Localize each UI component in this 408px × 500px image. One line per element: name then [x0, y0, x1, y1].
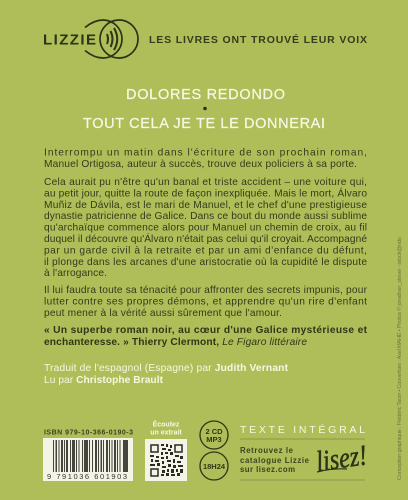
catalogue text: Retrouvez le — [240, 446, 294, 455]
synopsis intro paragraph — [44, 148, 367, 170]
synopsis main paragraph: Cela aurait pu n'être qu'un banal et triste accident – une voiture qui, — [44, 177, 367, 188]
vertical print credits: Conception graphique : Frédéric Tacer • Couverture : Axel MAHÉ • Photos © jonathan_stever - istock@ndo — [396, 237, 403, 480]
synopsis closing paragraph: lutter contre ses propres démons, et apprendre qu'un rire d'enfant — [44, 296, 367, 308]
synopsis main paragraph: à l'arrogance. — [44, 268, 107, 279]
title block: DOLORES REDONDO — [126, 87, 285, 103]
barcode: 9 791036 601903 — [47, 472, 127, 481]
badge: 2 CD MP3: MP3 — [206, 435, 222, 444]
ISBN label: ISBN 979-10-366-0190-3 — [44, 430, 133, 436]
barcode — [43, 438, 133, 481]
catalogue text: catalogue Lizzie — [240, 456, 310, 465]
synopsis main paragraph — [44, 177, 367, 279]
full text label: TEXTE INTÉGRAL — [240, 423, 365, 436]
badge: 2 CD MP3: 2 CD — [205, 427, 223, 436]
synopsis closing paragraph: peut mener à la vérité aussi sûrement que l'amour. — [44, 308, 282, 319]
catalogue text: sur lisez.com — [240, 465, 295, 474]
title block: TOUT CELA JE TE LE DONNERAI — [83, 116, 325, 132]
synopsis main paragraph: par un garde civil à la retraite et par un ami d'enfance du défunt, — [44, 245, 367, 256]
translator and narrator credits: Lu par Christophe Brault — [44, 375, 164, 386]
logo: lisez: lisez! — [314, 439, 369, 478]
synopsis intro paragraph: Interrompu un matin dans l'écriture de son prochain roman, — [44, 148, 367, 158]
logo: Lizzie: LIZZIE — [43, 32, 96, 48]
press quote — [44, 325, 368, 348]
translator and narrator credits — [44, 363, 289, 386]
synopsis main paragraph: il plonge dans les arcanes d'une aristocratie où la cupidité le dispute — [44, 257, 367, 268]
translator and narrator credits: Traduit de l'espagnol (Espagne) par Judith Vernant — [44, 363, 289, 374]
synopsis closing paragraph — [44, 285, 368, 319]
audio extract label — [150, 420, 182, 436]
badge: duration: 18H24 — [203, 462, 226, 471]
synopsis main paragraph: dynastie patricienne de Galice. Dans ce bout du monde aussi sublime — [44, 211, 367, 222]
synopsis main paragraph: duquel il découvre qu'Álvaro n'était pas celui qu'il croyait. Accompagné — [44, 232, 367, 245]
synopsis intro paragraph: Manuel Ortigosa, auteur à succès, trouve deux policiers à sa porte. — [44, 159, 357, 170]
synopsis main paragraph: qu'archaïque commence alors pour Manuel un chemin de croix, au fil — [44, 223, 367, 234]
press quote: « Un superbe roman noir, au cœur d'une Galice mystérieuse et — [44, 325, 368, 336]
title block — [83, 87, 325, 132]
catalogue text — [240, 446, 310, 474]
tagline: LES LIVRES ONT TROUVÉ LEUR VOIX — [149, 33, 367, 46]
QR code — [145, 439, 187, 481]
audio extract label: Écoutez — [153, 420, 180, 428]
logo: Lizzie — [43, 20, 138, 58]
badge: duration — [200, 452, 228, 480]
audio extract label: un extrait — [150, 430, 182, 436]
synopsis main paragraph: au petit jour, quitte la route de façon inexpliquée. Mais le mort, Álvaro — [44, 186, 367, 199]
synopsis closing paragraph: Il lui faudra toute sa ténacité pour affronter des secrets impunis, pour — [44, 285, 368, 296]
press quote: enchanteresse. » Thierry Clermont, Le Figaro littéraire — [44, 337, 307, 348]
badge: 2 CD MP3 — [200, 421, 228, 449]
synopsis main paragraph: Muñiz de Dávila, est le mari de Manuel, et le chef d'une prestigieuse — [44, 200, 367, 211]
